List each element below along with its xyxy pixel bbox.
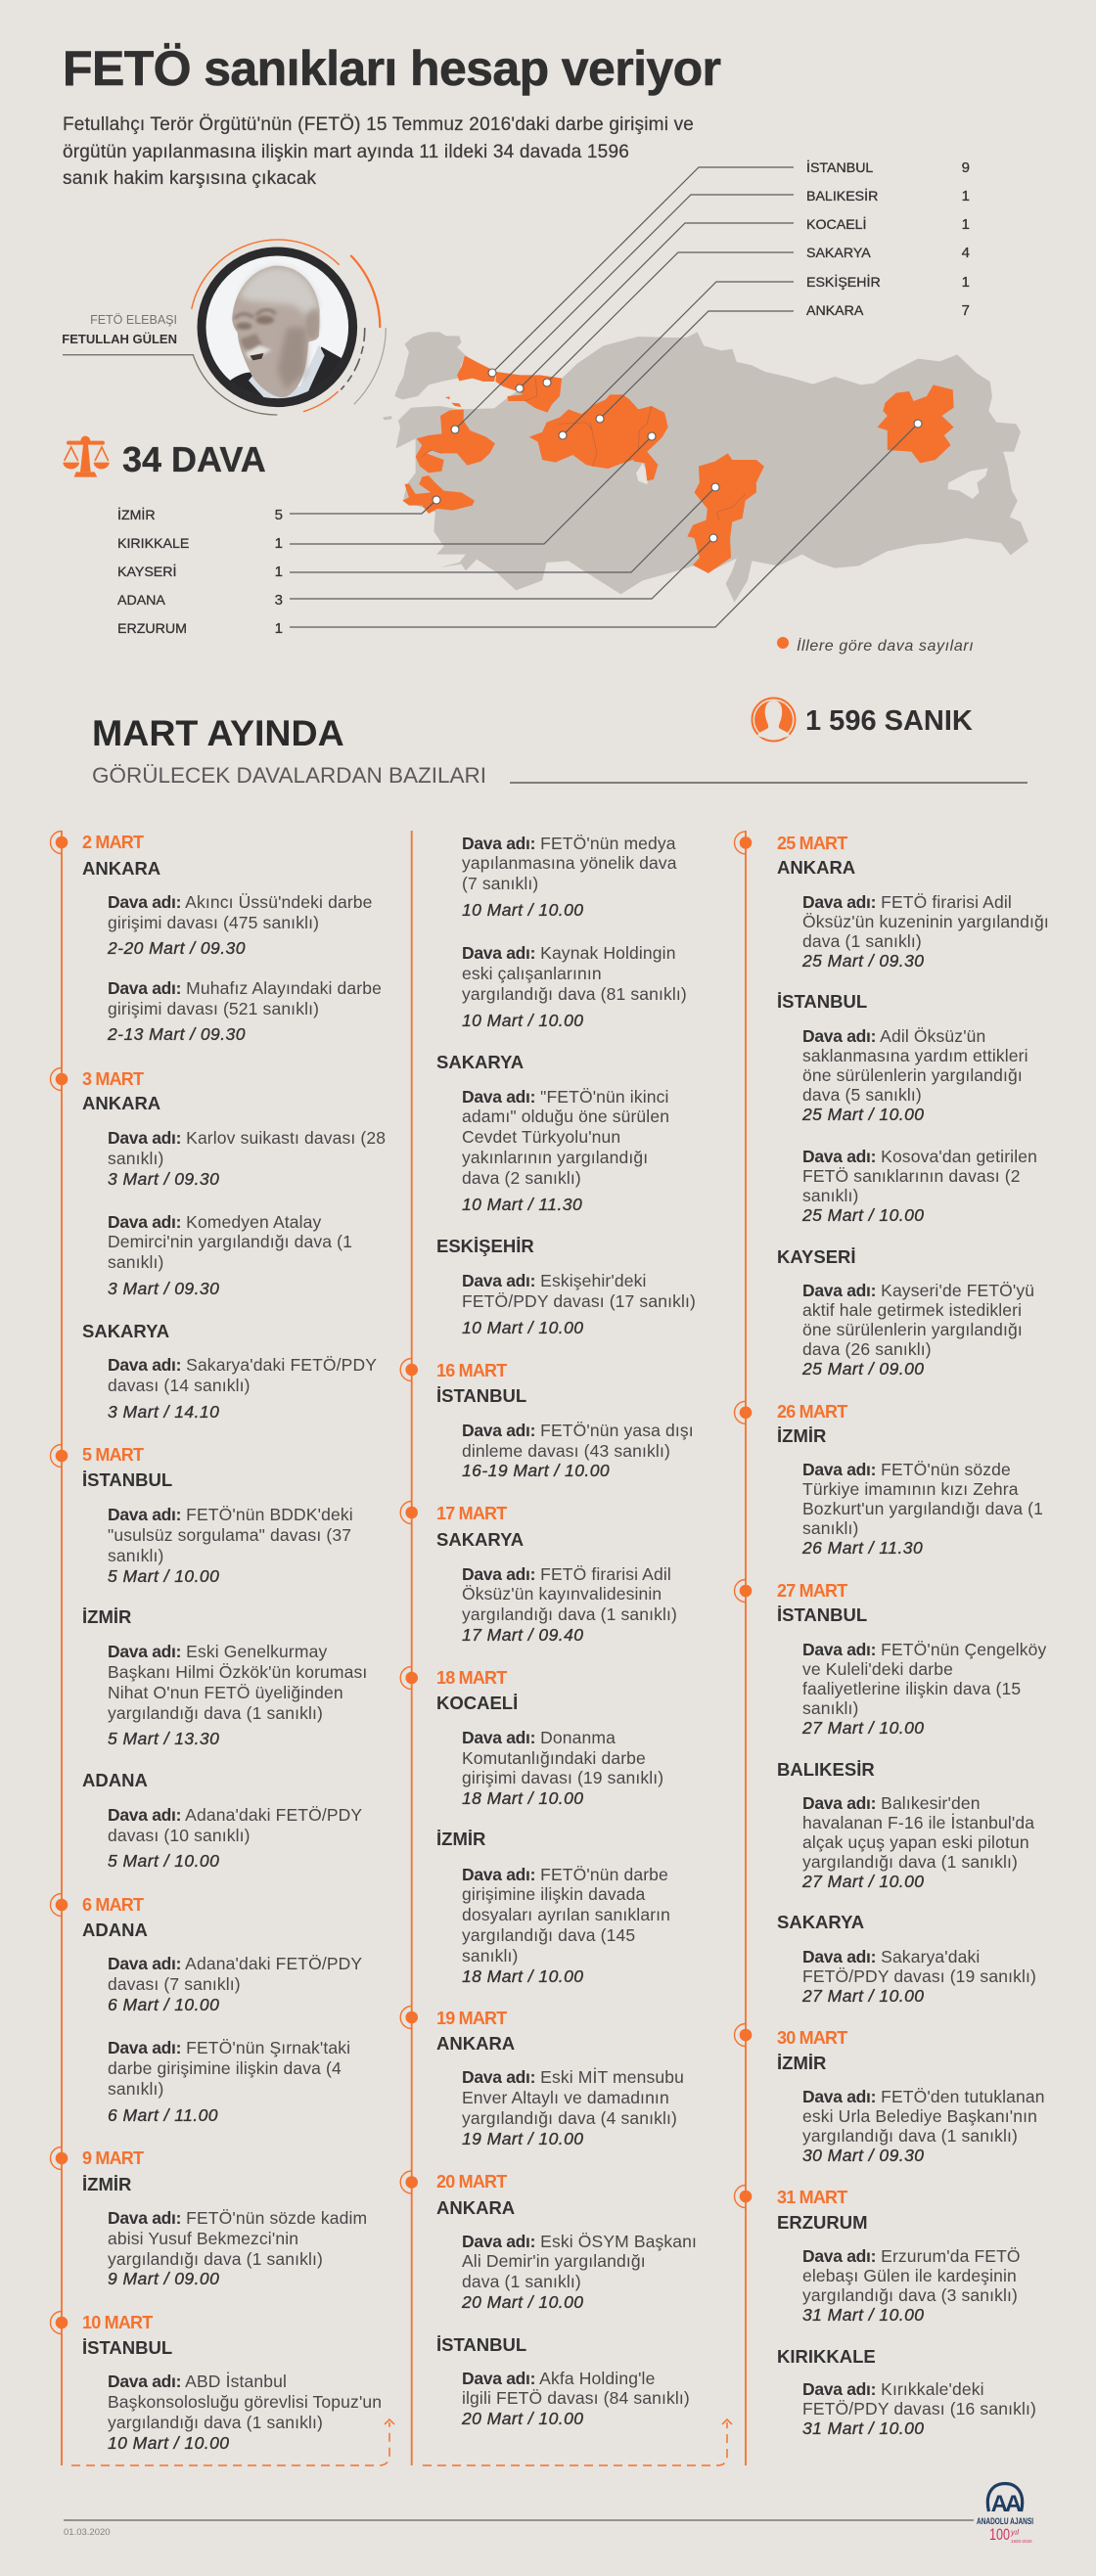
case: 3 Mart / 14.10 bbox=[108, 1402, 219, 1422]
highlighted provinces bbox=[402, 355, 954, 573]
case: eski Urla Belediye Başkanı'nın bbox=[802, 2106, 1037, 2126]
case bbox=[462, 2369, 690, 2428]
case: Dava adı: Kayseri'de FETÖ'yü bbox=[802, 1281, 1034, 1300]
case: Dava adı: FETÖ'nün sözde bbox=[802, 1460, 1011, 1479]
case: girişimi davası (19 sanıklı) bbox=[462, 1768, 663, 1787]
province list: left: ADANA bbox=[117, 593, 165, 609]
province list: right bbox=[806, 159, 970, 319]
case: 2-20 Mart / 09.30 bbox=[108, 938, 246, 958]
case: Dava adı: FETÖ'nün BDDK'deki bbox=[108, 1505, 353, 1524]
province list: left: 1 bbox=[275, 620, 283, 637]
case bbox=[462, 943, 687, 1030]
case: yargılandığı dava (1 sanıklı) bbox=[802, 2126, 1018, 2146]
case: Cevdet Türkyolu'nun bbox=[462, 1127, 620, 1147]
province list: right: İSTANBUL bbox=[806, 160, 873, 176]
case: 6 Mart / 10.00 bbox=[108, 1995, 219, 2014]
case bbox=[802, 1792, 1034, 1890]
case: 10 Mart / 10.00 bbox=[462, 1011, 583, 1030]
case: Dava adı: Adana'daki FETÖ/PDY bbox=[108, 1805, 362, 1825]
province list: right: ANKARA bbox=[806, 303, 863, 319]
case: 10 Mart / 10.00 bbox=[108, 2433, 229, 2453]
leader lines with location dots bbox=[290, 167, 918, 627]
portrait caption: FETÖ ELEBAŞI bbox=[90, 313, 177, 327]
case: sanıklı) bbox=[802, 1186, 859, 1205]
date: 20 MART bbox=[436, 2172, 506, 2192]
timeline lines, markers and dashed continuation arrows bbox=[51, 831, 752, 2465]
case: Dava adı: FETÖ'den tutuklanan bbox=[802, 2087, 1045, 2106]
intro paragraph: Fetullahçı Terör Örgütü'nün (FETÖ) 15 Temmuz 2016'daki darbe girişimi ve bbox=[63, 114, 694, 135]
date: 2 MART bbox=[82, 833, 143, 852]
date: 9 MART bbox=[82, 2148, 143, 2168]
city: İZMİR bbox=[777, 2053, 826, 2072]
case: 25 Mart / 10.00 bbox=[802, 1205, 924, 1225]
case: Öksüz'ün kayınvalidesinin bbox=[462, 1584, 662, 1604]
case: Dava adı: Sakarya'daki bbox=[802, 1947, 980, 1966]
city: ERZURUM bbox=[777, 2212, 867, 2233]
city: ESKİŞEHİR bbox=[436, 1236, 534, 1256]
case: 10 Mart / 11.30 bbox=[462, 1195, 582, 1214]
portrait decorative arcs bbox=[63, 240, 386, 415]
case: 2-13 Mart / 09.30 bbox=[108, 1024, 246, 1044]
date: 30 MART bbox=[777, 2028, 846, 2048]
city: ANKARA bbox=[436, 2033, 515, 2054]
city: SAKARYA bbox=[777, 1912, 864, 1932]
province list: left: 3 bbox=[275, 592, 283, 609]
case: dava (2 sanıklı) bbox=[462, 1168, 581, 1188]
panel: timeline column 3 bbox=[777, 834, 1049, 2438]
city: SAKARYA bbox=[436, 1529, 524, 1550]
date: 17 MART bbox=[436, 1504, 506, 1523]
city: ADANA bbox=[82, 1770, 148, 1790]
case: yargılandığı dava (3 sanıklı) bbox=[802, 2285, 1018, 2305]
case: havalanan F-16 ile İstanbul'da bbox=[802, 1812, 1034, 1831]
case: Dava adı: "FETÖ'nün ikinci bbox=[462, 1087, 669, 1107]
province list: left: 1 bbox=[275, 564, 283, 580]
section subheading: GÖRÜLECEK DAVALARDAN BAZILARI bbox=[92, 763, 486, 788]
total defendants: 1 596 SANIK bbox=[805, 705, 973, 737]
title: FETÖ sanıkları hesap veriyor bbox=[63, 41, 720, 96]
city: BALIKESİR bbox=[777, 1759, 875, 1779]
icon: scales of justice bbox=[63, 436, 110, 477]
case: yargılandığı dava (81 sanıklı) bbox=[462, 984, 687, 1004]
city: İZMİR bbox=[777, 1425, 826, 1446]
case: 27 Mart / 10.00 bbox=[802, 1871, 924, 1890]
Anadolu Ajansı logo: yıl bbox=[1010, 2528, 1019, 2537]
case: Dava adı: Karlov suikastı davası (28 bbox=[108, 1128, 386, 1148]
case: FETÖ/PDY davası (19 sanıklı) bbox=[802, 1966, 1036, 1986]
case: Dava adı: Kırıkkale'deki bbox=[802, 2379, 984, 2399]
case: Başkanı Hilmi Özkök'ün koruması bbox=[108, 1662, 367, 1682]
case: yargılandığı dava (4 sanıklı) bbox=[462, 2108, 677, 2128]
city: ANKARA bbox=[82, 1093, 160, 1113]
case: adamı" olduğu öne sürülen bbox=[462, 1107, 669, 1126]
case: 9 Mart / 09.00 bbox=[108, 2269, 219, 2288]
Anadolu Ajansı logo: 100 bbox=[989, 2525, 1010, 2544]
footer rule bbox=[64, 2519, 974, 2521]
date stamp: 01.03.2020 bbox=[64, 2527, 111, 2538]
case: sanıklı) bbox=[108, 1546, 164, 1565]
case: Dava adı: FETÖ'nün medya bbox=[462, 834, 676, 853]
case bbox=[802, 1281, 1034, 1378]
case bbox=[802, 2379, 1036, 2438]
province list: right: 1 bbox=[962, 188, 970, 204]
case: Ali Demir'in yargılandığı bbox=[462, 2251, 646, 2271]
case bbox=[462, 1087, 669, 1214]
province list: left: 1 bbox=[275, 535, 283, 552]
case: Dava adı: Balıkesir'den bbox=[802, 1792, 981, 1812]
city: İSTANBUL bbox=[436, 1385, 526, 1406]
grey landmass bbox=[383, 332, 1028, 603]
case bbox=[108, 1642, 367, 1748]
city: ANKARA bbox=[436, 2197, 515, 2217]
date: 6 MART bbox=[82, 1895, 143, 1915]
province list: right: BALIKESİR bbox=[806, 189, 878, 204]
case: yakınlarının yargılandığı bbox=[462, 1148, 648, 1167]
city: İZMİR bbox=[436, 1829, 485, 1849]
city: İSTANBUL bbox=[82, 1469, 172, 1490]
case: 5 Mart / 13.30 bbox=[108, 1729, 219, 1748]
case: 18 Mart / 10.00 bbox=[462, 1966, 583, 1986]
city: İZMİR bbox=[82, 1606, 131, 1627]
city: İSTANBUL bbox=[777, 991, 867, 1012]
portrait of Fetullah Gülen bbox=[202, 251, 353, 413]
date: 16 MART bbox=[436, 1361, 506, 1380]
case: FETÖ/PDY davası (17 sanıklı) bbox=[462, 1291, 696, 1311]
province list: right: SAKARYA bbox=[806, 246, 871, 261]
case: Dava adı: Akfa Holding'le bbox=[462, 2369, 655, 2388]
date: 10 MART bbox=[82, 2313, 152, 2332]
case bbox=[108, 978, 382, 1044]
date: 27 MART bbox=[777, 1581, 846, 1601]
case: 10 Mart / 10.00 bbox=[462, 900, 583, 920]
case: aktif hale getirmek istedikleri bbox=[802, 1300, 1022, 1320]
case: Dava adı: FETÖ firarisi Adil bbox=[802, 892, 1012, 912]
case: saklanmasına yardım ettikleri bbox=[802, 1045, 1028, 1064]
case: yargılandığı dava (1 sanıklı) bbox=[802, 1851, 1018, 1871]
case: dava (5 sanıklı) bbox=[802, 1084, 922, 1104]
city: ADANA bbox=[82, 1920, 148, 1940]
section divider bbox=[510, 782, 1028, 784]
case: Dava adı: FETÖ'nün yasa dışı bbox=[462, 1421, 694, 1440]
city: ANKARA bbox=[777, 857, 855, 878]
province list: right: ESKİŞEHİR bbox=[806, 275, 881, 291]
case: Dava adı: Akıncı Üssü'ndeki darbe bbox=[108, 892, 373, 912]
case bbox=[108, 2372, 382, 2453]
case bbox=[108, 1805, 362, 1871]
city: KAYSERİ bbox=[777, 1246, 856, 1267]
case: Öksüz'ün kuzeninin yargılandığı bbox=[802, 912, 1049, 931]
case: Dava adı: Adil Öksüz'ün bbox=[802, 1025, 985, 1045]
date: 25 MART bbox=[777, 834, 846, 853]
case: darbe girişimine ilişkin dava (4 bbox=[108, 2058, 342, 2078]
lakes bbox=[947, 468, 987, 499]
icon: person bbox=[752, 699, 795, 742]
case bbox=[108, 1355, 377, 1422]
Anadolu Ajansı logo: ANADOLU AJANSI bbox=[977, 2516, 1033, 2526]
case: Dava adı: Donanma bbox=[462, 1728, 616, 1747]
case: Dava adı: Eski ÖSYM Başkanı bbox=[462, 2232, 697, 2251]
case: alçak uçuş yapan eski pilotun bbox=[802, 1831, 1029, 1851]
Anadolu Ajansı logo: AA bbox=[991, 2491, 1022, 2517]
case: 25 Mart / 09.00 bbox=[802, 1359, 924, 1378]
province list: left: KIRIKKALE bbox=[117, 536, 189, 552]
intro paragraph: örgütün yapılanmasına ilişkin mart ayında 11 ildeki 34 davada 1596 bbox=[63, 141, 629, 162]
city: İSTANBUL bbox=[82, 2337, 172, 2358]
case: Dava adı: FETÖ'nün sözde kadim bbox=[108, 2208, 367, 2228]
case: ve Kuleli'deki darbe bbox=[802, 1659, 953, 1679]
case: dinleme davası (43 sanıklı) bbox=[462, 1441, 670, 1461]
case: 25 Mart / 09.30 bbox=[802, 951, 924, 971]
case: 20 Mart / 10.00 bbox=[462, 2292, 583, 2312]
case: Demirci'nin yargılandığı dava (1 bbox=[108, 1232, 352, 1251]
case: Bozkurt'un yargılandığı dava (1 bbox=[802, 1499, 1043, 1518]
portrait caption: FETULLAH GÜLEN bbox=[62, 332, 177, 346]
case: 16-19 Mart / 10.00 bbox=[462, 1461, 610, 1480]
case: girişimine ilişkin davada bbox=[462, 1884, 645, 1904]
case: 27 Mart / 10.00 bbox=[802, 1986, 924, 2006]
province list: left: ERZURUM bbox=[117, 621, 187, 637]
case: Dava adı: FETÖ'nün darbe bbox=[462, 1865, 668, 1884]
city: SAKARYA bbox=[82, 1321, 169, 1341]
case: ilgili FETÖ davası (84 sanıklı) bbox=[462, 2388, 690, 2408]
case bbox=[802, 1947, 1036, 2006]
case: elebaşı Gülen ile kardeşinin bbox=[802, 2266, 1017, 2285]
intro paragraph: sanık hakim karşısına çıkacak bbox=[63, 168, 316, 189]
case: davası (7 sanıklı) bbox=[108, 1974, 241, 1994]
case: Dava adı: Kaynak Holdingin bbox=[462, 943, 676, 963]
province list: right: 9 bbox=[962, 159, 970, 176]
total cases: 34 DAVA bbox=[122, 439, 266, 479]
date: 19 MART bbox=[436, 2009, 506, 2028]
case bbox=[108, 1505, 353, 1586]
Anadolu Ajansı logo bbox=[977, 2483, 1033, 2544]
case bbox=[462, 1421, 694, 1480]
case: sanıklı) bbox=[108, 2079, 164, 2099]
case: Dava adı: FETÖ firarisi Adil bbox=[462, 1564, 671, 1584]
city: KOCAELİ bbox=[436, 1693, 518, 1713]
Anadolu Ajansı logo: 1920-2020 bbox=[1011, 2539, 1032, 2544]
case: Dava adı: Erzurum'da FETÖ bbox=[802, 2246, 1021, 2266]
case: Başkonsolosluğu görevlisi Topuz'un bbox=[108, 2392, 382, 2412]
case: Dava adı: Eskişehir'deki bbox=[462, 1271, 647, 1290]
case: dosyaları ayrılan sanıkların bbox=[462, 1905, 670, 1924]
case: abisi Yusuf Bekmezci'nin bbox=[108, 2229, 298, 2248]
city: İSTANBUL bbox=[436, 2334, 526, 2354]
province list: left: 5 bbox=[275, 507, 283, 523]
case: sanıklı) bbox=[802, 1698, 859, 1718]
province list: right: 7 bbox=[962, 302, 970, 319]
panel: timeline column 1 bbox=[82, 833, 386, 2453]
case: 10 Mart / 10.00 bbox=[462, 1318, 583, 1337]
case: (7 sanıklı) bbox=[462, 874, 538, 893]
intro paragraph bbox=[63, 113, 694, 189]
case: Komutanlığındaki darbe bbox=[462, 1748, 646, 1768]
case: 17 Mart / 09.40 bbox=[462, 1625, 583, 1645]
case: yapılanmasına yönelik dava bbox=[462, 853, 677, 873]
case: 20 Mart / 10.00 bbox=[462, 2409, 583, 2428]
case: yargılandığı dava (1 sanıklı) bbox=[108, 2249, 323, 2269]
case: 26 Mart / 11.30 bbox=[802, 1538, 923, 1558]
map legend: İllere göre dava sayıları bbox=[797, 638, 974, 655]
case bbox=[802, 1025, 1028, 1123]
case: yargılandığı dava (1 sanıklı) bbox=[108, 2413, 323, 2432]
case: dava (1 sanıklı) bbox=[462, 2272, 581, 2291]
case: 3 Mart / 09.30 bbox=[108, 1279, 219, 1298]
case: Türkiye imamının kızı Zehra bbox=[802, 1479, 1019, 1499]
case bbox=[802, 1460, 1043, 1558]
case: davası (10 sanıklı) bbox=[108, 1826, 251, 1845]
case bbox=[462, 834, 677, 920]
case bbox=[108, 2038, 350, 2125]
case: Dava adı: Kosova'dan getirilen bbox=[802, 1147, 1037, 1166]
province list: left bbox=[117, 507, 283, 637]
case: Dava adı: Adana'daki FETÖ/PDY bbox=[108, 1954, 362, 1973]
case: sanıklı) bbox=[462, 1946, 519, 1966]
case: Dava adı: FETÖ'nün Çengelköy bbox=[802, 1640, 1046, 1659]
case: Dava adı: Eski MİT mensubu bbox=[462, 2067, 684, 2087]
case: 3 Mart / 09.30 bbox=[108, 1169, 219, 1189]
case bbox=[462, 1728, 663, 1808]
province list: right: 1 bbox=[962, 274, 970, 291]
case: 6 Mart / 11.00 bbox=[108, 2105, 218, 2125]
case: Dava adı: FETÖ'nün Şırnak'taki bbox=[108, 2038, 350, 2057]
case: 5 Mart / 10.00 bbox=[108, 1851, 219, 1871]
case: Dava adı: Sakarya'daki FETÖ/PDY bbox=[108, 1355, 377, 1375]
case: sanıklı) bbox=[108, 1252, 164, 1272]
case: girişimi davası (521 sanıklı) bbox=[108, 999, 319, 1018]
date: 26 MART bbox=[777, 1402, 846, 1422]
case: Dava adı: Eski Genelkurmay bbox=[108, 1642, 327, 1661]
case: Dava adı: Komedyen Atalay bbox=[108, 1212, 321, 1232]
map of Turkey bbox=[383, 332, 1028, 603]
case: Nihat O'nun FETÖ üyeliğinden bbox=[108, 1683, 343, 1702]
province list: left: KAYSERİ bbox=[117, 565, 176, 580]
case: 25 Mart / 10.00 bbox=[802, 1104, 924, 1123]
case bbox=[108, 2208, 367, 2288]
city: SAKARYA bbox=[436, 1052, 524, 1072]
case bbox=[462, 1865, 670, 1986]
case: Dava adı: Muhafız Alayındaki darbe bbox=[108, 978, 382, 998]
date: 5 MART bbox=[82, 1445, 143, 1465]
case: yargılandığı dava (1 sanıklı) bbox=[462, 1604, 677, 1624]
case: eski çalışanlarının bbox=[462, 964, 602, 983]
case bbox=[802, 1640, 1047, 1738]
case bbox=[802, 2087, 1045, 2165]
case: girişimi davası (475 sanıklı) bbox=[108, 913, 319, 932]
case: "usulsüz sorgulama" davası (37 bbox=[108, 1525, 351, 1545]
case: 30 Mart / 09.30 bbox=[802, 2146, 924, 2165]
case bbox=[802, 892, 1049, 971]
case: Enver Altaylı ve damadının bbox=[462, 2088, 669, 2107]
case bbox=[802, 1147, 1037, 1225]
case bbox=[108, 1128, 386, 1189]
case: 31 Mart / 10.00 bbox=[802, 2418, 924, 2438]
case bbox=[462, 2232, 697, 2312]
case bbox=[108, 1212, 352, 1298]
case: sanıklı) bbox=[802, 1518, 859, 1538]
date: 31 MART bbox=[777, 2188, 846, 2207]
case bbox=[802, 2246, 1021, 2325]
portrait caption bbox=[62, 313, 177, 346]
case bbox=[108, 1954, 362, 2014]
case: FETÖ sanıklarının davası (2 bbox=[802, 1166, 1021, 1186]
case: yargılandığı dava (1 sanıklı) bbox=[108, 1703, 323, 1723]
city: ANKARA bbox=[82, 858, 160, 879]
city: İSTANBUL bbox=[777, 1604, 867, 1625]
province list: right: KOCAELİ bbox=[806, 217, 867, 233]
province list: left: İZMİR bbox=[117, 508, 156, 523]
case: dava (26 sanıklı) bbox=[802, 1339, 932, 1359]
case: 31 Mart / 10.00 bbox=[802, 2305, 924, 2325]
case: davası (14 sanıklı) bbox=[108, 1376, 251, 1395]
case: 27 Mart / 10.00 bbox=[802, 1718, 924, 1738]
case: Dava adı: ABD İstanbul bbox=[108, 2372, 287, 2391]
case: faaliyetlerine ilişkin dava (15 bbox=[802, 1679, 1021, 1698]
case: öne sürülenlerin yargılandığı bbox=[802, 1320, 1023, 1339]
case: 18 Mart / 10.00 bbox=[462, 1788, 583, 1808]
case: FETÖ/PDY davası (16 sanıklı) bbox=[802, 2399, 1036, 2418]
panel: timeline column 2 bbox=[436, 834, 697, 2428]
case: 5 Mart / 10.00 bbox=[108, 1566, 219, 1586]
case: öne sürülenlerin yargılandığı bbox=[802, 1064, 1023, 1084]
date: 3 MART bbox=[82, 1069, 143, 1089]
city: İZMİR bbox=[82, 2174, 131, 2194]
case bbox=[462, 2067, 684, 2148]
city: KIRIKKALE bbox=[777, 2346, 876, 2366]
case bbox=[462, 1271, 696, 1337]
date: 18 MART bbox=[436, 1668, 506, 1688]
case: sanıklı) bbox=[108, 1149, 164, 1168]
province list: right: 1 bbox=[962, 216, 970, 233]
section heading: MART AYINDA bbox=[92, 712, 344, 753]
case bbox=[462, 1564, 677, 1645]
case: yargılandığı dava (145 bbox=[462, 1925, 635, 1945]
province list: right: 4 bbox=[962, 245, 970, 261]
legend dot bbox=[777, 637, 789, 649]
case bbox=[108, 892, 373, 958]
case: dava (1 sanıklı) bbox=[802, 931, 922, 951]
case: 19 Mart / 10.00 bbox=[462, 2129, 583, 2148]
